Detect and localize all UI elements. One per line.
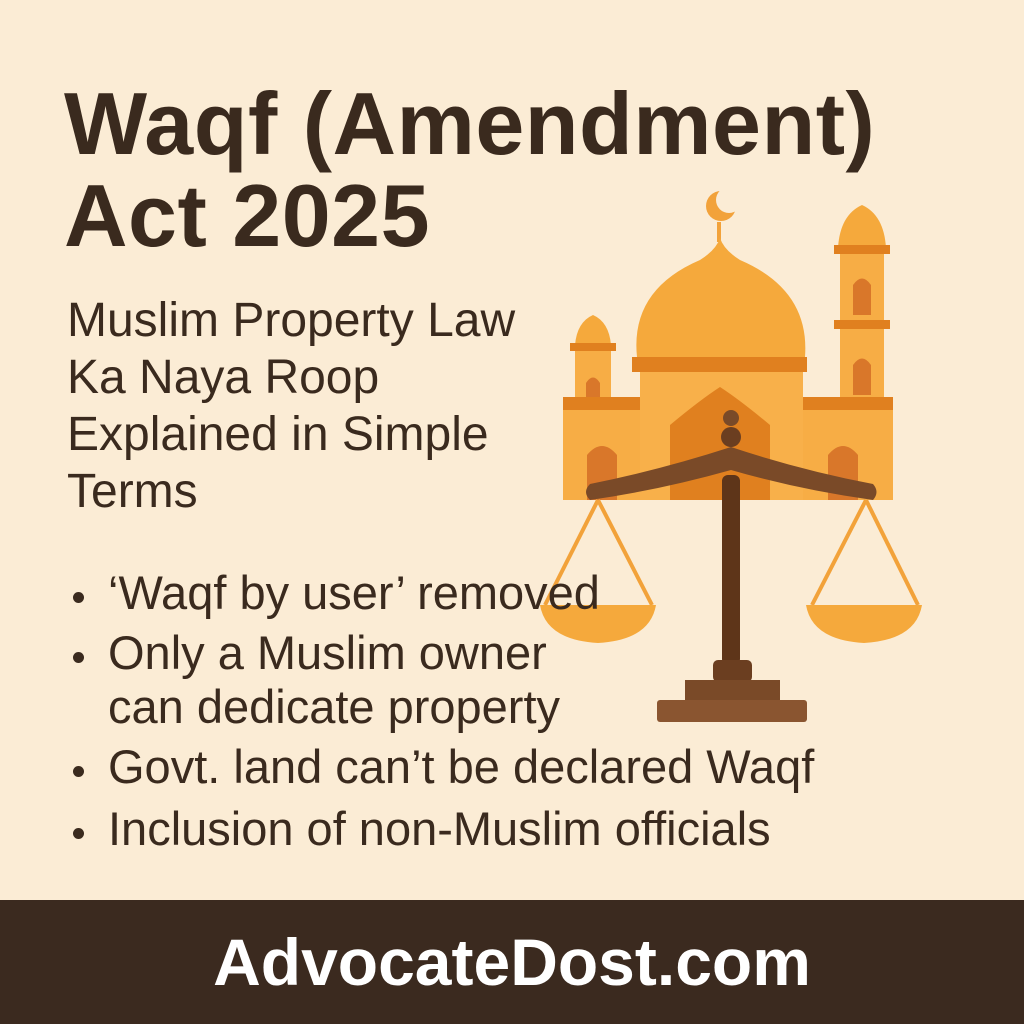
wings: [563, 397, 893, 500]
subtitle: Terms: [67, 465, 198, 518]
footer: [0, 900, 1024, 1024]
subtitle: Explained in Simple: [67, 408, 489, 461]
title: Act 2025: [64, 166, 430, 265]
title: [64, 74, 875, 265]
bullet list: Only a Muslim owner: [108, 626, 547, 679]
scale: [545, 500, 918, 605]
left tower: [575, 315, 611, 345]
subtitle: [67, 294, 516, 518]
bullet list: can dedicate property: [108, 680, 560, 733]
subtitle: Muslim Property Law: [67, 294, 515, 347]
dome: [636, 238, 805, 357]
title: Waqf (Amendment): [64, 74, 875, 173]
subtitle: Ka Naya Roop: [67, 351, 379, 404]
bullet list: ‘Waqf by user’ removed: [108, 566, 600, 619]
bullet list: [73, 566, 814, 855]
right tower: [838, 205, 886, 248]
bullet list: Inclusion of non-Muslim officials: [108, 802, 771, 855]
footer: AdvocateDost.com: [213, 925, 811, 999]
crescent: [706, 187, 742, 221]
bullet list: Govt. land can’t be declared Waqf: [108, 740, 814, 793]
